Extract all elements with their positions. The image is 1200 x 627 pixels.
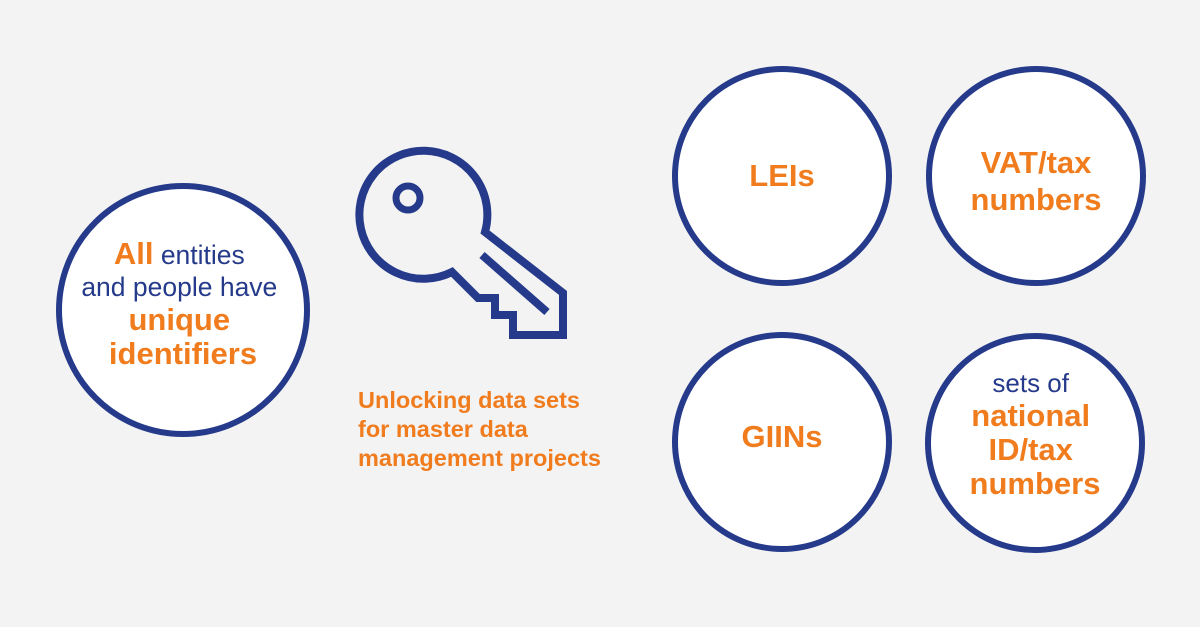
panel: VAT/tax numbers: VAT/tax — [981, 145, 1092, 180]
panel: national ID/tax numbers: numbers — [970, 466, 1100, 501]
panel: all entities circle — [59, 186, 307, 434]
panel: LEIs — [675, 69, 889, 283]
panel: GIINs — [675, 335, 889, 549]
panel: national ID/tax numbers: ID/tax — [988, 432, 1074, 467]
panel: national ID/tax numbers: sets of — [992, 368, 1070, 398]
panel: VAT/tax numbers: numbers — [971, 182, 1101, 217]
panel: national ID/tax numbers — [928, 336, 1142, 550]
text: unlocking data sets: Unlocking data sets — [358, 387, 580, 413]
panel: VAT/tax numbers — [929, 69, 1143, 283]
panel: national ID/tax numbers: national — [971, 398, 1090, 433]
text: unlocking data sets: for master data — [358, 416, 529, 442]
panel: GIINs: GIINs — [742, 419, 822, 454]
text: all entities: and people have — [81, 272, 277, 302]
text: all entities: identifiers — [109, 336, 257, 371]
icon: key — [359, 151, 563, 335]
panel: LEIs: LEIs — [749, 158, 815, 193]
text: all entities: All entities — [114, 236, 245, 271]
text: all entities: unique — [129, 302, 230, 337]
text: unlocking data sets: management projects — [358, 445, 601, 471]
